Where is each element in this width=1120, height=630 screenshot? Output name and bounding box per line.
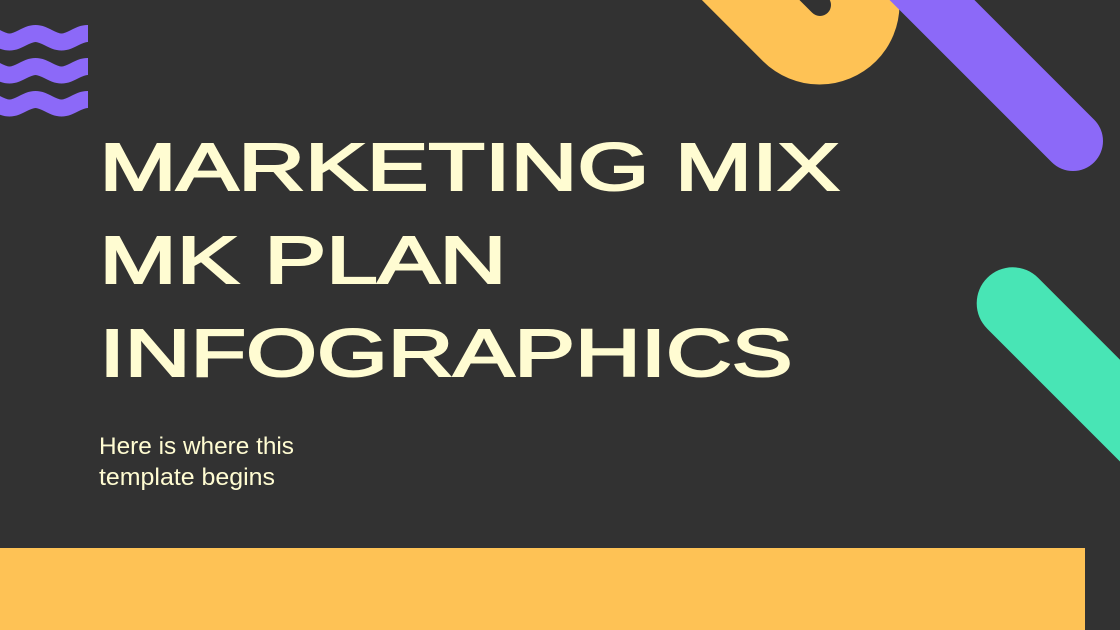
shape: purple diagonal bar — [873, 0, 1073, 141]
shape: green diagonal bar — [1013, 303, 1120, 503]
title — [100, 131, 839, 391]
title: INFOGRAPHICS — [100, 317, 792, 391]
subtitle: Here is where this — [99, 433, 294, 460]
subtitle — [99, 433, 294, 491]
title: MARKETING MIX — [100, 131, 839, 205]
subtitle: template begins — [99, 464, 275, 491]
title: MK PLAN — [100, 224, 506, 298]
shape: yellow rounded U at top — [620, 0, 820, 5]
yellow footer bar — [0, 548, 1085, 630]
icon: purple waves — [0, 34, 114, 108]
